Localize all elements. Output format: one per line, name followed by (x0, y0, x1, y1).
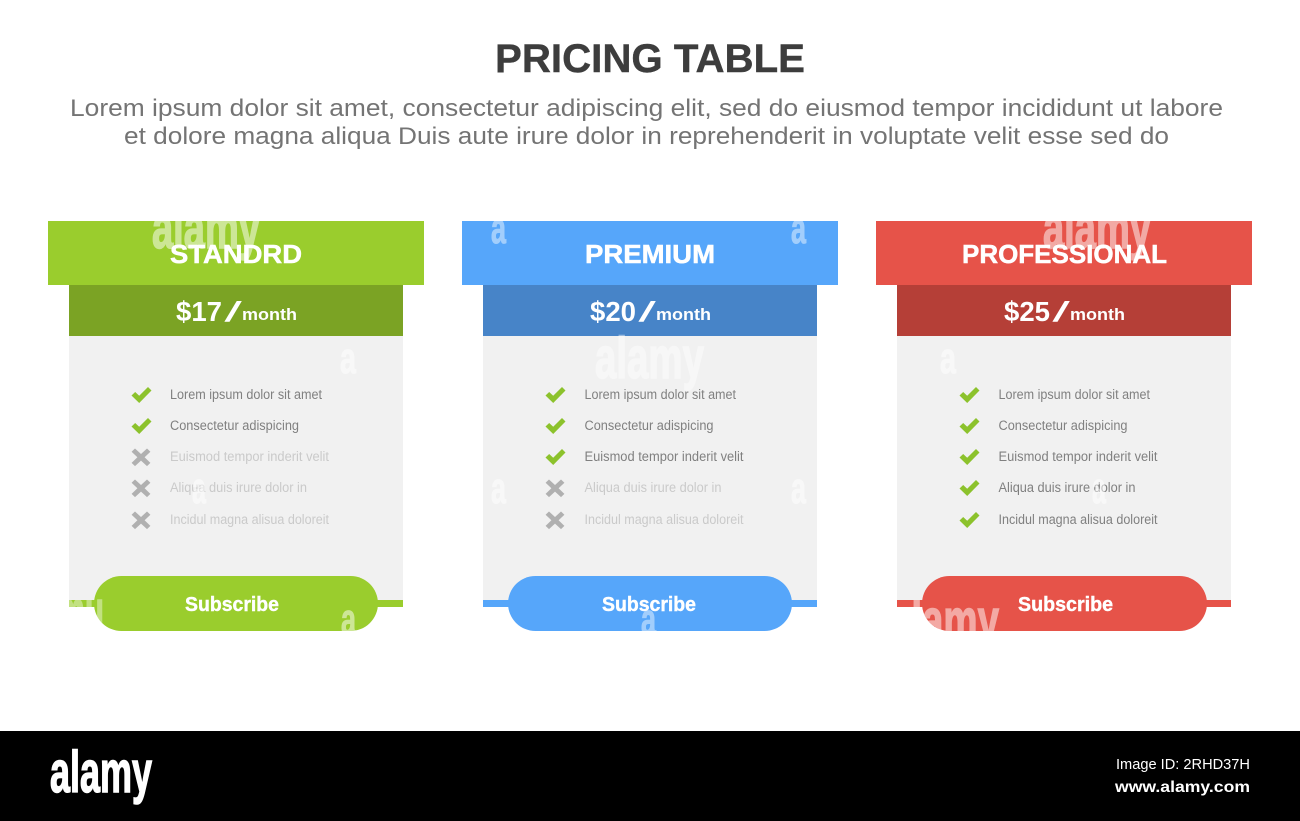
panel: professional plan (876, 221, 1252, 631)
feature list: Aliqua duis irure dolor in (584, 480, 722, 495)
feature list: Aliqua duis irure dolor in (170, 480, 307, 495)
faint watermark marks: a (340, 334, 356, 383)
plan header: PROFESSIONAL (876, 221, 1252, 285)
plan header: PREMIUM (462, 221, 838, 285)
subtitle text block (70, 95, 1223, 150)
feature list: Consectetur adispicing (998, 418, 1128, 433)
plan header: PREMIUM: a (491, 204, 506, 253)
subtitle text block: et dolore magna aliqua Duis aute irure dolor in reprehenderit in voluptate velit esse sed do (124, 123, 1169, 150)
price band: $20 / month: / (637, 296, 657, 327)
plan body (897, 336, 1231, 600)
website: www.alamy.com (1114, 779, 1250, 796)
title: PRICING TABLE (495, 37, 805, 81)
faint watermark marks (192, 334, 1106, 513)
subscribe button (483, 576, 817, 631)
feature list (132, 387, 329, 529)
feature list: Incidul magna alisua doloreit (998, 512, 1158, 527)
feature list: Incidul magna alisua doloreit (170, 512, 329, 527)
footer logo: alamy (50, 740, 152, 805)
footer bar (0, 731, 1300, 821)
price band: $25 / month (897, 285, 1231, 336)
plan header: PREMIUM: PREMIUM (585, 239, 715, 269)
plan body (483, 336, 817, 600)
plan header: PROFESSIONAL: PROFESSIONAL (962, 239, 1167, 269)
panel: standard plan (48, 221, 424, 631)
feature list: Aliqua duis irure dolor in (998, 480, 1136, 495)
feature list (960, 387, 1158, 528)
subscribe button: Subscribe (1018, 594, 1113, 616)
feature list (546, 387, 744, 529)
price band: $17 / month: $17 (176, 296, 222, 327)
faint watermark marks: a (192, 464, 206, 513)
subtitle text block: Lorem ipsum dolor sit amet, consectetur adipiscing elit, sed do eiusmod tempor incididunt ut labore (70, 95, 1223, 122)
feature list: Euismod tempor inderit velit (998, 449, 1158, 464)
subscribe button (69, 576, 403, 631)
faint watermark marks: a (491, 464, 506, 513)
subscribe button: Subscribe (185, 594, 279, 616)
feature list: Lorem ipsum dolor sit amet (170, 387, 322, 402)
plan header: STANDRD: STANDRD (170, 239, 302, 269)
subscribe button: Subscribe (602, 594, 696, 616)
feature list: Euismod tempor inderit velit (584, 449, 744, 464)
subscribe button (897, 576, 1231, 631)
subscribe button: alamy (890, 588, 999, 653)
price band: $17 / month: month (242, 305, 297, 324)
faint watermark marks: a (791, 464, 806, 513)
price band: $25 / month: month (1070, 305, 1125, 324)
price band: $25 / month: $25 (1004, 296, 1050, 327)
price band: $25 / month: / (1051, 296, 1071, 327)
feature list: Euismod tempor inderit velit (170, 449, 329, 464)
plan header: PROFESSIONAL: alamy (1043, 196, 1151, 261)
feature list: Lorem ipsum dolor sit amet (998, 387, 1150, 402)
feature list: Lorem ipsum dolor sit amet (584, 387, 736, 402)
price band: $20 / month (483, 285, 817, 336)
price band: $20 / month: $20 (590, 296, 636, 327)
plan header: STANDRD: alamy (152, 196, 260, 261)
subscribe button: a (341, 595, 356, 644)
price band: $17 / month: / (223, 296, 243, 327)
price band: $20 / month: month (656, 305, 711, 324)
plan header: STANDRD (48, 221, 424, 285)
subscribe button: amu (40, 579, 104, 644)
panel: premium plan (462, 204, 838, 644)
subscribe button: a (641, 595, 656, 644)
faint watermark marks: a (940, 334, 956, 383)
feature list: Consectetur adispicing (584, 418, 714, 433)
faint watermark marks: a (1092, 464, 1106, 513)
watermark: alamy (595, 326, 704, 391)
feature list: Incidul magna alisua doloreit (584, 512, 744, 527)
price band: $17 / month (69, 285, 403, 336)
image id: Image ID: 2RHD37H (1116, 756, 1250, 773)
plan body (69, 336, 403, 600)
feature list: Consectetur adispicing (170, 418, 299, 433)
plan header: PREMIUM: a (791, 204, 806, 253)
